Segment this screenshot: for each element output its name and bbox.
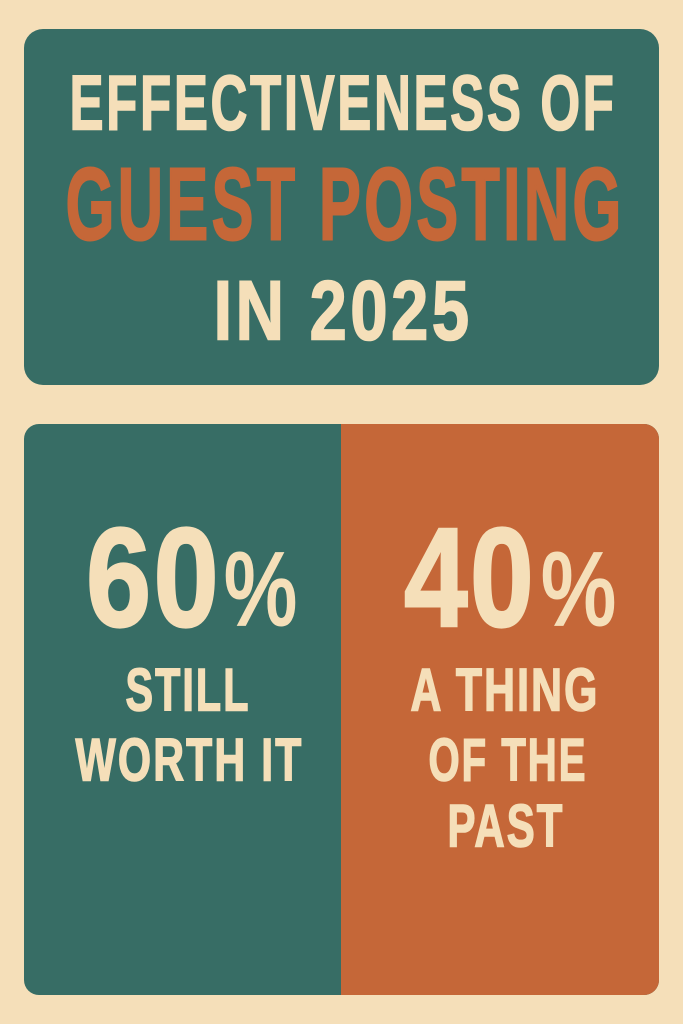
stat: 60% still worth it: STILL	[126, 656, 250, 724]
stat: 60% still worth it: WORTH IT	[76, 726, 304, 794]
stat: 60% still worth it: 60	[86, 498, 221, 656]
stat: 60% still worth it: %	[224, 532, 297, 646]
stat: 40% a thing of the past: A THING	[410, 656, 600, 724]
title line: In 2025: IN 2025	[214, 264, 472, 358]
stat: 40% a thing of the past	[404, 498, 616, 860]
stat: 40% a thing of the past: OF THE	[428, 726, 588, 794]
stat: 40% a thing of the past: PAST	[448, 792, 564, 860]
stat: 60% still worth it	[76, 498, 304, 794]
stat: 40% a thing of the past: %	[541, 532, 616, 646]
title panel	[24, 29, 659, 385]
stat: 40% a thing of the past: 40	[404, 498, 536, 656]
panel: comparison	[24, 424, 659, 995]
